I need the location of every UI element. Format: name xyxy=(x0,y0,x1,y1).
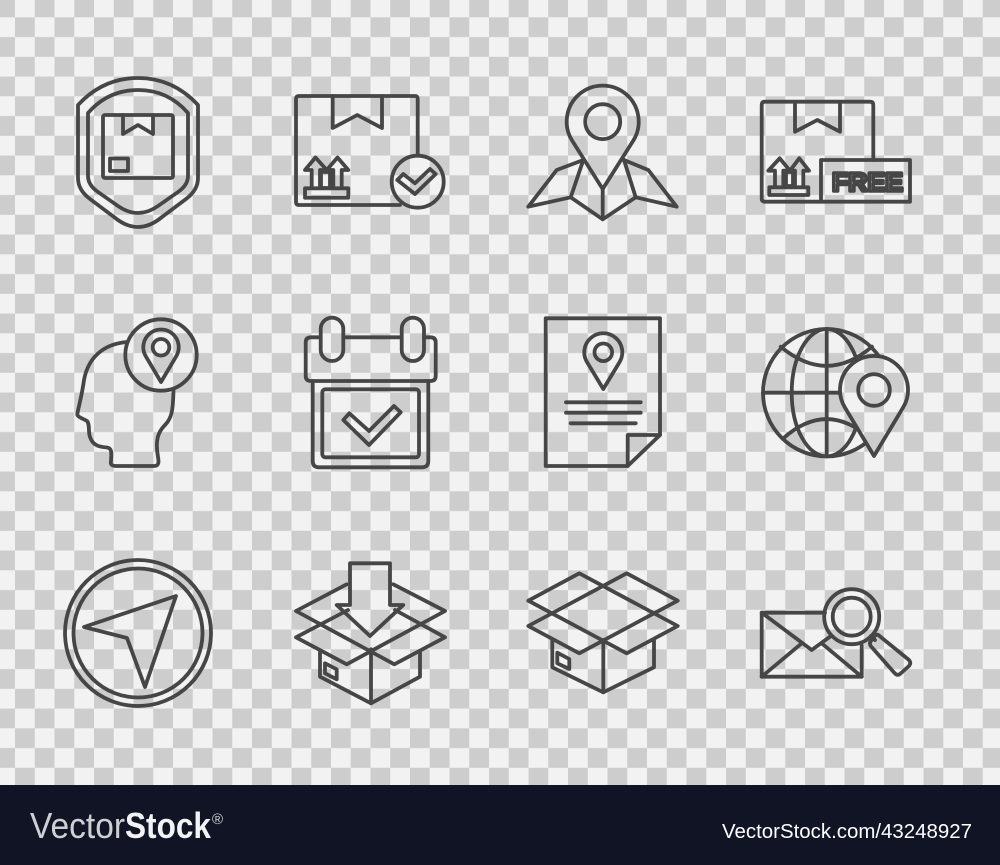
icon: envelope with magnifying glass xyxy=(762,589,910,677)
icon: open box with down arrow xyxy=(296,563,445,703)
image id url: VectorStock.com/43248927 xyxy=(722,821,972,843)
logo: VectorStock: ® xyxy=(212,811,223,828)
icon: empty open box xyxy=(528,573,678,692)
icon: map pin on folded map xyxy=(528,86,677,219)
icon: document with location pin xyxy=(546,318,660,466)
icon: compass navigation arrow xyxy=(65,560,211,706)
label: free: FREE xyxy=(832,167,903,197)
footer bar xyxy=(0,785,1000,865)
icon: shield with parcel xyxy=(78,78,198,227)
icon: calendar with check mark xyxy=(306,318,436,467)
icon: globe with location pin xyxy=(763,329,908,456)
icon: parcel with free label xyxy=(762,102,910,202)
logo: VectorStock: Vector xyxy=(30,805,125,846)
logo: VectorStock: Stock xyxy=(125,805,212,846)
icon: head with location pin xyxy=(77,319,197,466)
icon: parcel with check mark xyxy=(296,96,444,208)
